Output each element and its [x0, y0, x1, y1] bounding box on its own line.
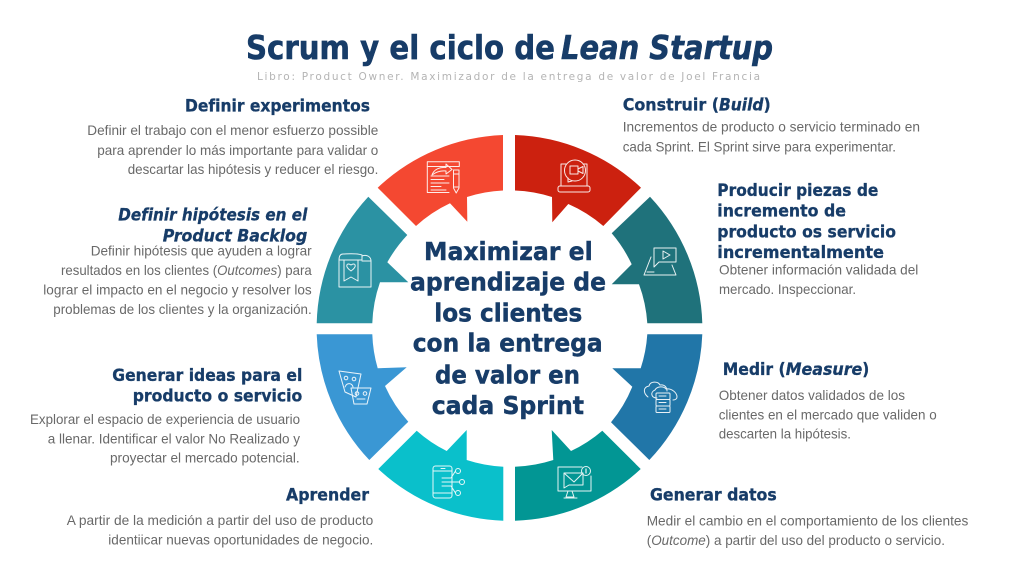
- heading: Generar ideas para el: [112, 366, 302, 385]
- panel: aprender: [67, 485, 373, 547]
- text block: Medir el cambio en el comportamiento de los clientes: [647, 513, 968, 529]
- segment: aprender: [378, 430, 503, 521]
- center statement: cada Sprint: [432, 391, 584, 420]
- subtitle: Libro: Product Owner. Maximizador de la entrega de valor de Joel Francia: [257, 71, 760, 83]
- center statement: Maximizar el: [424, 237, 593, 266]
- text block: Definir hipótesis que ayuden a lograr: [91, 243, 312, 259]
- heading: Build: [719, 96, 764, 115]
- icon: webcam on laptop: [558, 160, 590, 192]
- panel: definir hipótesis: [43, 206, 312, 317]
- heading: Product Backlog: [163, 227, 307, 246]
- heading: Generar datos: [650, 486, 777, 505]
- text block: (Outcome) a partir del uso del producto o servicio.: [647, 532, 945, 548]
- heading: [723, 360, 869, 379]
- segment: definir hipótesis: [317, 197, 408, 323]
- segment: producir piezas: [612, 197, 702, 323]
- text block: [647, 513, 968, 548]
- text block: resultados en los clientes (Outcomes) para: [61, 262, 312, 278]
- text block: A partir de la medición a partir del uso de producto: [67, 512, 373, 528]
- center statement: con la entrega: [413, 329, 603, 358]
- text block: proyectar el mercado potencial.: [110, 450, 300, 466]
- icon: phone with connections: [433, 466, 464, 498]
- panel: generar ideas: [30, 366, 302, 466]
- text block: a llenar. Identificar el valor No Realizado y: [48, 430, 300, 446]
- segment: medir: [611, 334, 702, 460]
- panel: generar datos: [647, 486, 968, 548]
- panel: medir: [719, 360, 937, 442]
- icon: document with arrow and pencil: [427, 162, 459, 193]
- heading: producto o servicio: [133, 387, 302, 406]
- heading: incremento de: [717, 202, 846, 221]
- text block: [87, 122, 379, 177]
- text block: clientes en el mercado que validen o: [719, 406, 937, 422]
- panel: producir piezas: [717, 181, 918, 297]
- heading: [118, 206, 308, 246]
- text block: Explorar el espacio de experiencia de usuario: [30, 411, 300, 427]
- text block: [719, 261, 918, 297]
- panel: construir: [623, 96, 920, 154]
- heading: Measure: [786, 360, 862, 379]
- segment: construir: [515, 135, 641, 226]
- text block: Definir el trabajo con el menor esfuerzo possible: [87, 122, 378, 138]
- center statement: los clientes: [434, 298, 582, 327]
- text block: [67, 512, 373, 547]
- ring diagram: [317, 135, 702, 521]
- icon: bookmark browser window: [339, 254, 371, 287]
- heading: Aprender: [286, 485, 370, 504]
- title: [246, 28, 773, 67]
- text block: Obtener datos validados de los: [719, 387, 905, 403]
- heading: Definir experimentos: [185, 96, 370, 116]
- text block: [623, 119, 920, 154]
- text block: Obtener información validada del: [719, 261, 918, 277]
- icon: video on screen: [644, 248, 676, 275]
- segment: definir experimentos: [378, 135, 503, 226]
- segment: generar datos: [515, 430, 641, 521]
- panel: definir experimentos: [87, 96, 379, 177]
- text block: problemas de los clientes y la organización.: [53, 301, 312, 317]
- heading: ): [862, 360, 869, 379]
- center statement: [410, 237, 606, 420]
- text block: [30, 411, 300, 466]
- center statement: aprendizaje de: [410, 268, 606, 297]
- title: Scrum y el ciclo de: [246, 28, 555, 67]
- text block: para aprender lo más importante para validar o: [97, 142, 379, 158]
- heading: [717, 181, 896, 262]
- text block: Incrementos de producto o servicio terminado en: [623, 119, 920, 135]
- text block: mercado. Inspeccionar.: [719, 281, 856, 297]
- heading: producto os servicio: [717, 222, 896, 241]
- text block: [43, 243, 312, 317]
- heading: incrementalmente: [717, 243, 884, 262]
- heading: Construir (: [623, 96, 719, 115]
- icon: clouds and server: [644, 382, 677, 412]
- center statement: de valor en: [435, 360, 580, 389]
- text block: cada Sprint. El Sprint sirve para experimentar.: [623, 138, 896, 154]
- text block: identiicar nuevas oportunidades de negocio.: [108, 531, 373, 547]
- heading: [112, 366, 302, 406]
- icon: sad and neutral faces: [339, 371, 371, 404]
- icon: monitor with mail notification: [558, 466, 591, 498]
- text block: [719, 387, 937, 442]
- heading: Medir (: [723, 360, 786, 379]
- heading: Producir piezas de: [717, 181, 878, 200]
- text block: descarten la hipótesis.: [719, 426, 851, 442]
- heading: ): [764, 96, 771, 115]
- segment: generar ideas: [317, 334, 408, 460]
- text block: lograr el impacto en el negocio y resolver los: [43, 281, 312, 297]
- title: Lean Startup: [561, 28, 773, 67]
- heading: Definir hipótesis en el: [118, 206, 308, 225]
- heading: [623, 96, 771, 115]
- text block: descartar las hipótesis y reducer el riesgo.: [128, 161, 378, 177]
